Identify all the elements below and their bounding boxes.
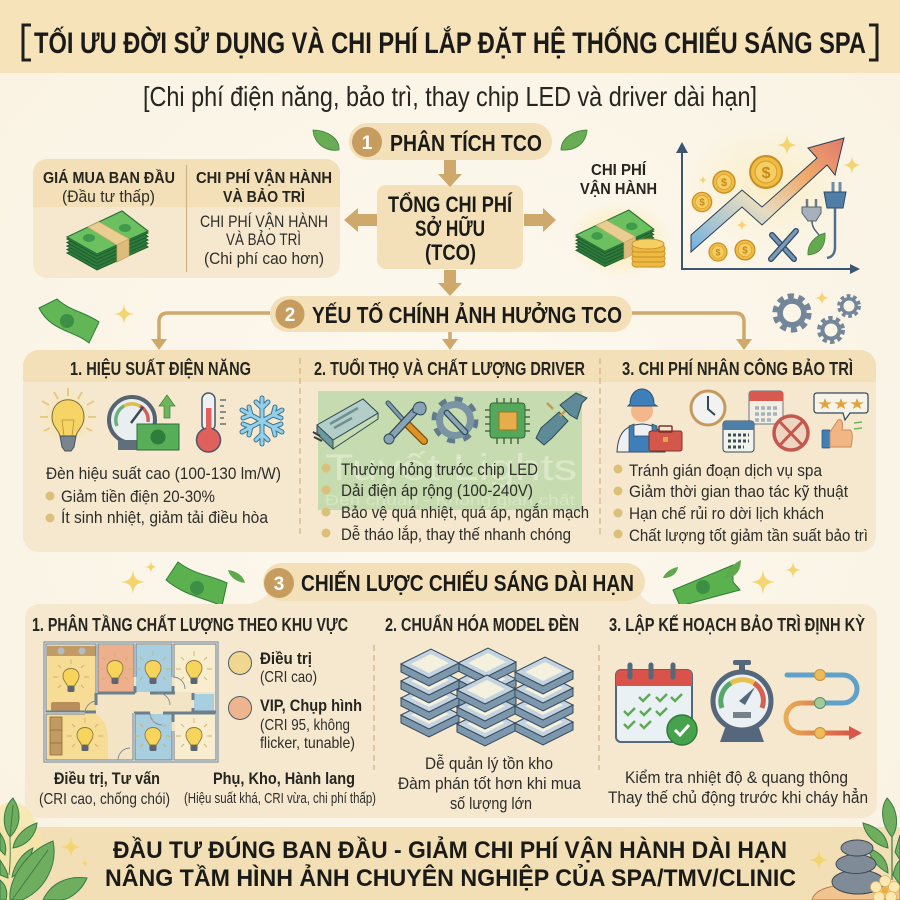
watermark rectangle: Đèn chuẩn - Không gian chất [325, 492, 576, 509]
bottom banner: ĐẦU TƯ ĐÚNG BAN ĐẦU - GIẢM CHI PHÍ VẬN HÀNH DÀI HẠN [113, 835, 787, 864]
icon: thermometer [196, 393, 226, 452]
TCO centre box: (TCO) [425, 240, 476, 265]
leaves beside section 1 [313, 130, 587, 150]
TCO centre box [377, 185, 523, 269]
text: efficiency points [46, 464, 281, 527]
caption: treatment zone: (CRI cao, chống chói) [39, 791, 170, 808]
legend: (CRI 95, không [260, 717, 350, 734]
text: standardisation benefits: Dễ quản lý tồn kho [425, 754, 553, 773]
legend: (CRI cao) [260, 669, 317, 686]
text: driver points: Thường hỏng trước chip LED [341, 460, 538, 479]
strategy 2 heading: 2. CHUẨN HÓA MODEL ĐÈN [385, 614, 579, 635]
operating cost text: VÀ BẢO TRÌ [226, 230, 301, 249]
text: driver points: Bảo vệ quá nhiệt, quá áp, ngắn mạch [341, 503, 589, 522]
icon: technician with toolbox [617, 389, 682, 452]
chart: rising cost trend [676, 123, 861, 274]
legend: flicker, tunable) [260, 735, 355, 752]
subtitle: [Chi phí điện năng, bảo trì, thay chip LED và driver dài hạn] [143, 81, 757, 112]
caption: treatment zone: Điều trị, Tư vấn [54, 770, 160, 788]
text: standardisation benefits: Đàm phán tốt hơn khi mua [398, 775, 582, 793]
caption: treatment zone [39, 770, 170, 808]
text: maintenance actions: Kiểm tra nhiệt độ & quang thông [625, 769, 848, 787]
icon: wrench and screwdriver [384, 402, 426, 444]
text: labour points: Giảm thời gian thao tác kỹ thuật [629, 482, 848, 501]
plant bottom-left [0, 798, 87, 900]
floor plan [45, 643, 217, 761]
section 3 heading pill: CHIẾN LƯỢC CHIẾU SÁNG DÀI HẠN [301, 569, 634, 596]
icon: meter and money [109, 395, 179, 450]
panel: purchase vs operating cost [33, 159, 340, 278]
operating cost heading [196, 168, 332, 206]
text: labour points: Tránh gián đoạn dịch vụ spa [629, 461, 822, 480]
text: labour points: Chất lượng tốt giảm tần suất bảo trì [629, 526, 868, 545]
icon: money stack [67, 211, 148, 270]
operating cost label [580, 160, 657, 198]
icon: banknote left [39, 299, 134, 343]
caption: auxiliary zone: (Hiệu suất khá, CRI vừa, chi phí thấp) [184, 790, 376, 807]
operating cost label: CHI PHÍ [591, 160, 647, 179]
legend [228, 650, 362, 752]
text: labour points [614, 461, 868, 545]
TCO centre box: TỔNG CHI PHÍ [388, 192, 513, 217]
icon: light bulb [38, 388, 98, 451]
caption: auxiliary zone: Phụ, Kho, Hành lang [213, 770, 355, 788]
column 2 heading: 2. TUỔI THỌ VÀ CHẤT LƯỢNG DRIVER [314, 358, 585, 379]
purchase price heading [43, 168, 175, 206]
icon: plug [536, 393, 587, 445]
operating cost heading: CHI PHÍ VẬN HÀNH [196, 168, 332, 187]
strategy 1 heading: 1. PHÂN TẦNG CHẤT LƯỢNG THEO KHU VỰC [32, 614, 348, 635]
watermark rectangle [318, 391, 582, 510]
purchase price heading: GIÁ MUA BAN ĐẦU [43, 168, 175, 187]
decoration left of section 3 [121, 561, 245, 606]
section 2 heading pill and connectors: YẾU TỐ CHÍNH ẢNH HƯỞNG TCO [312, 300, 622, 328]
plant and spa stones bottom-right [812, 798, 900, 900]
column 1 heading: 1. HIỆU SUẤT ĐIỆN NĂNG [70, 358, 251, 379]
title band [0, 0, 900, 73]
icon: chip [485, 398, 530, 444]
text: driver points [322, 460, 589, 544]
section 2 heading pill and connectors: 2 [285, 305, 295, 326]
column 3 heading: 3. CHI PHÍ NHÂN CÔNG BẢO TRÌ [622, 358, 853, 379]
panel: factors [23, 350, 876, 552]
icon: rating bubble and thumb: ★★★ [817, 395, 865, 413]
text: efficiency points: Giảm tiền điện 20-30% [61, 487, 215, 506]
icon: stacks of standard panels [401, 648, 573, 746]
section 1 heading pill [349, 123, 552, 160]
icon: cancelled schedule [774, 416, 808, 450]
TCO centre box: SỞ HỮU [415, 216, 485, 241]
icon: LED driver [313, 399, 378, 449]
section 1 heading pill: 1 [362, 133, 373, 154]
bottom banner: NÂNG TẦM HÌNH ẢNH CHUYÊN NGHIỆP CỦA SPA/TMV/CLINIC [105, 863, 796, 892]
icon: gauge [713, 660, 771, 742]
text: standardisation benefits: số lượng lớn [450, 795, 532, 813]
operating cost text [200, 212, 328, 268]
text: standardisation benefits [398, 754, 582, 813]
panel: long-term strategy [25, 563, 877, 818]
operating cost heading: VÀ BẢO TRÌ [223, 187, 305, 206]
icon: calendars [723, 391, 783, 452]
bottom banner [0, 827, 900, 900]
text: efficiency points: Ít sinh nhiệt, giảm tải điều hòa [61, 508, 268, 527]
icon: gears right [777, 291, 858, 341]
text: driver points: Dải điện áp rộng (100-240V) [341, 481, 533, 500]
icon: clock [691, 391, 725, 425]
text: maintenance actions: Thay thế chủ động trước khi cháy hẳn [608, 788, 868, 807]
legend: Điều trị [260, 650, 312, 668]
text: labour points: Hạn chế rủi ro dời lịch khách [629, 504, 824, 523]
operating cost label: VẬN HÀNH [580, 179, 657, 198]
icon: maintenance calendar [616, 665, 697, 745]
icon: money and coins [568, 202, 672, 278]
icon: maintenance roadmap [786, 670, 862, 740]
arrows around TCO box [344, 160, 556, 296]
decoration right of section 3 [663, 560, 801, 606]
icon: gear with wrench [434, 399, 476, 441]
section 3 heading pill [246, 563, 654, 605]
text: driver points: Dễ tháo lắp, thay thế nhanh chóng [341, 525, 571, 544]
icon: plugs [802, 182, 846, 258]
operating cost text: CHI PHÍ VẬN HÀNH [200, 212, 328, 231]
flower [870, 876, 900, 900]
icon: rating bubble and thumb [814, 393, 868, 448]
icon: crossed tools [771, 231, 796, 259]
operating cost text: (Chi phí cao hơn) [204, 250, 324, 268]
text: efficiency points: Đèn hiệu suất cao (100-130 lm/W) [46, 464, 281, 483]
section 2 heading pill and connectors [151, 296, 752, 350]
legend: VIP, Chụp hình [260, 697, 362, 715]
spa stones [812, 840, 900, 900]
section 1 heading pill: PHÂN TÍCH TCO [390, 129, 542, 156]
purchase price heading: (Đầu tư thấp) [62, 188, 155, 206]
section 3 heading pill: 3 [274, 574, 284, 595]
watermark rectangle: Tuyết Lights [325, 447, 577, 488]
caption: auxiliary zone [184, 770, 376, 807]
icon: snowflake [242, 398, 282, 444]
text: maintenance actions [608, 769, 868, 807]
